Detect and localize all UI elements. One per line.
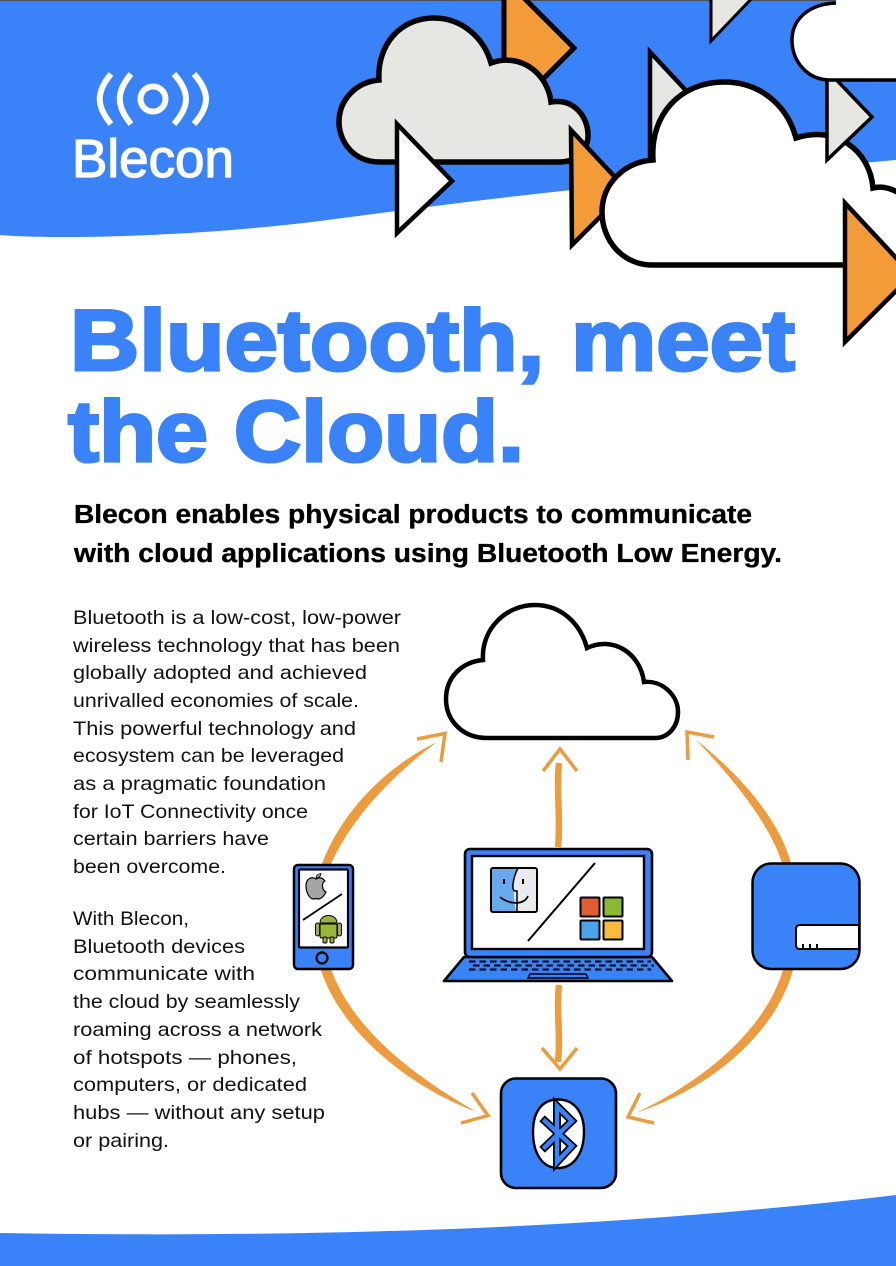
body text: paragraph 2: communicate with — [73, 963, 255, 985]
logo wordmark: Blecon — [72, 129, 234, 189]
body text: paragraph 1: globally adopted and achieved — [73, 662, 367, 684]
body text: paragraph 1: Bluetooth is a low-cost, low-power — [73, 607, 402, 629]
logo: Blecon — [72, 74, 234, 189]
cloud: large white — [602, 82, 896, 265]
trackpad — [528, 974, 588, 978]
arrow: phone to bluetooth device — [321, 969, 488, 1123]
triangle: right orange — [845, 203, 896, 342]
icon: apple — [306, 874, 326, 899]
icon: windows — [580, 898, 622, 940]
body text: paragraph 1: wireless technology that has been — [72, 635, 400, 657]
arrow: laptop to cloud — [543, 749, 577, 847]
arrow: laptop to bluetooth device — [542, 985, 577, 1069]
body text: paragraph 2 — [73, 908, 325, 1152]
icon: broadcast signal — [100, 74, 206, 124]
triangle: middle orange — [571, 130, 627, 245]
title: the Cloud. — [68, 384, 524, 480]
icon: laptop — [444, 849, 672, 981]
triangle: grey behind big cloud — [650, 52, 706, 168]
title: Bluetooth, meet — [70, 293, 795, 389]
keyboard — [469, 962, 654, 970]
icon: phone — [294, 865, 353, 969]
body text: paragraph 2: With Blecon, — [73, 908, 189, 930]
header blue band — [0, 0, 896, 237]
body text: paragraph 1: unrivalled economies of scale. — [73, 690, 359, 712]
triangle: small grey top — [711, 0, 755, 41]
body text: paragraph 1: This powerful technology and — [73, 718, 356, 740]
body text: paragraph 2: roaming across a network — [73, 1019, 322, 1041]
subheading — [73, 501, 782, 568]
body text: paragraph 1: been overcome. — [73, 856, 226, 878]
triangle: top orange — [504, 0, 574, 118]
body text: paragraph 2: hubs — without any setup — [73, 1102, 325, 1124]
diagram cloud — [446, 605, 678, 738]
icon: bluetooth device — [501, 1078, 616, 1188]
body text: paragraph 1: for IoT Connectivity once — [73, 801, 308, 823]
title — [68, 293, 795, 480]
body text: paragraph 2: of hotspots — phones, — [73, 1047, 297, 1069]
body text: paragraph 2: or pairing. — [73, 1130, 169, 1152]
icon: hub — [752, 864, 860, 969]
body text: paragraph 1 — [72, 607, 402, 878]
body text: paragraph 2: Bluetooth devices — [73, 936, 245, 958]
subheading: Blecon enables physical products to communicate — [74, 501, 752, 529]
subheading: with cloud applications using Bluetooth Low Energy. — [73, 540, 782, 568]
body text: paragraph 1: ecosystem can be leveraged — [73, 745, 344, 767]
triangle: white — [397, 124, 452, 233]
body text: paragraph 1: as a pragmatic foundation — [73, 773, 326, 795]
bottom blue band — [0, 1195, 896, 1266]
icon: finder — [491, 868, 537, 912]
body text: paragraph 2: the cloud by seamlessly — [73, 991, 300, 1013]
arrow: phone to cloud — [322, 734, 445, 864]
icon: android — [316, 916, 342, 943]
cloud: grey — [339, 18, 588, 162]
arrow: hub to bluetooth device — [628, 970, 793, 1123]
triangle: grey on big cloud — [827, 70, 872, 160]
body text: paragraph 1: certain barriers have — [73, 828, 269, 850]
body text: paragraph 2: computers, or dedicated — [73, 1074, 307, 1096]
cloud: white top right — [792, 3, 896, 80]
decorative clouds and triangles — [339, 0, 896, 342]
arrow: hub to cloud — [687, 732, 791, 863]
